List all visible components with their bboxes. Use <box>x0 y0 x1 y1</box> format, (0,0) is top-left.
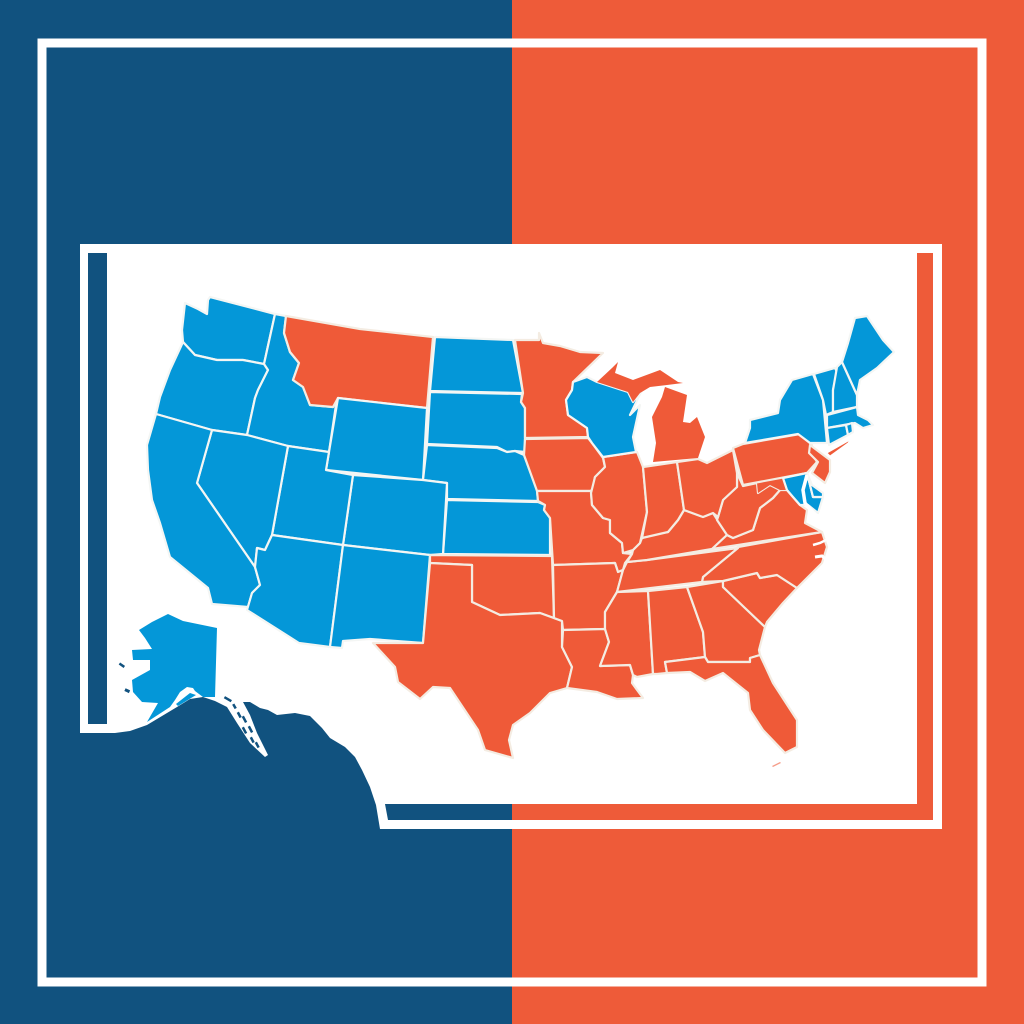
North Carolina lower sound inlet <box>815 556 829 562</box>
right orange bar <box>917 253 933 820</box>
Arkansas <box>553 563 623 630</box>
Tennessee <box>617 548 738 592</box>
Alaska: Kenai sliver <box>176 693 196 706</box>
Indiana <box>642 462 684 538</box>
North Carolina <box>702 532 827 588</box>
Wyoming <box>326 398 427 480</box>
Montana <box>284 316 433 408</box>
Alaska: southwestern island <box>124 688 130 693</box>
Kentucky <box>627 510 727 562</box>
Texas <box>373 563 572 758</box>
Nevada <box>197 430 288 567</box>
Utah <box>272 446 353 545</box>
New Mexico <box>330 545 430 648</box>
New York <box>745 374 827 443</box>
Kansas <box>443 500 550 555</box>
left blue bar <box>88 253 107 724</box>
West Virginia <box>717 473 780 538</box>
Alaska: western island <box>119 662 125 668</box>
Louisiana <box>562 629 643 699</box>
Illinois <box>591 452 647 553</box>
Maine <box>842 316 894 395</box>
Chesapeake Bay <box>803 475 818 518</box>
South Dakota <box>427 392 525 452</box>
North Dakota <box>430 337 523 393</box>
Georgia <box>687 581 765 662</box>
Rhode Island <box>846 423 853 435</box>
Arizona <box>247 535 343 647</box>
Nebraska <box>423 445 538 501</box>
background: blue left half <box>0 0 512 1024</box>
Ohio <box>677 450 737 517</box>
Florida Keys <box>772 762 781 767</box>
background: orange right half <box>512 0 1024 1024</box>
bottom bar: blue section <box>385 804 512 820</box>
Minnesota <box>515 333 603 438</box>
Alaska panhandle island specks <box>224 696 260 748</box>
Oregon <box>156 342 268 435</box>
Michigan: upper peninsula <box>597 362 683 402</box>
Long Island <box>827 440 850 456</box>
Vermont <box>814 368 837 415</box>
Missouri <box>537 491 632 572</box>
Michigan: lower peninsula <box>652 387 705 462</box>
Oklahoma <box>430 555 554 618</box>
Massachusetts <box>827 407 873 428</box>
Connecticut <box>827 425 848 445</box>
Virginia <box>712 490 822 549</box>
Maryland western panhandle <box>743 478 790 493</box>
Idaho <box>247 314 337 452</box>
map of the United States <box>119 297 894 767</box>
Florida <box>665 655 797 753</box>
North Carolina upper sound inlet <box>813 540 826 545</box>
Mississippi <box>600 591 653 677</box>
New Jersey <box>809 445 830 483</box>
bottom bar: orange section <box>512 804 933 820</box>
Washington <box>182 297 275 364</box>
Wisconsin <box>566 377 642 457</box>
Maryland <box>783 473 823 513</box>
white map panel with coastline cut-out <box>80 244 942 829</box>
New Hampshire <box>833 362 857 412</box>
Alaska <box>132 614 217 722</box>
Colorado <box>343 475 447 555</box>
South Carolina <box>723 573 797 627</box>
California <box>147 414 260 607</box>
Alabama <box>648 587 705 674</box>
Iowa <box>524 438 605 491</box>
Pennsylvania <box>733 434 817 485</box>
Delaware <box>807 473 823 497</box>
